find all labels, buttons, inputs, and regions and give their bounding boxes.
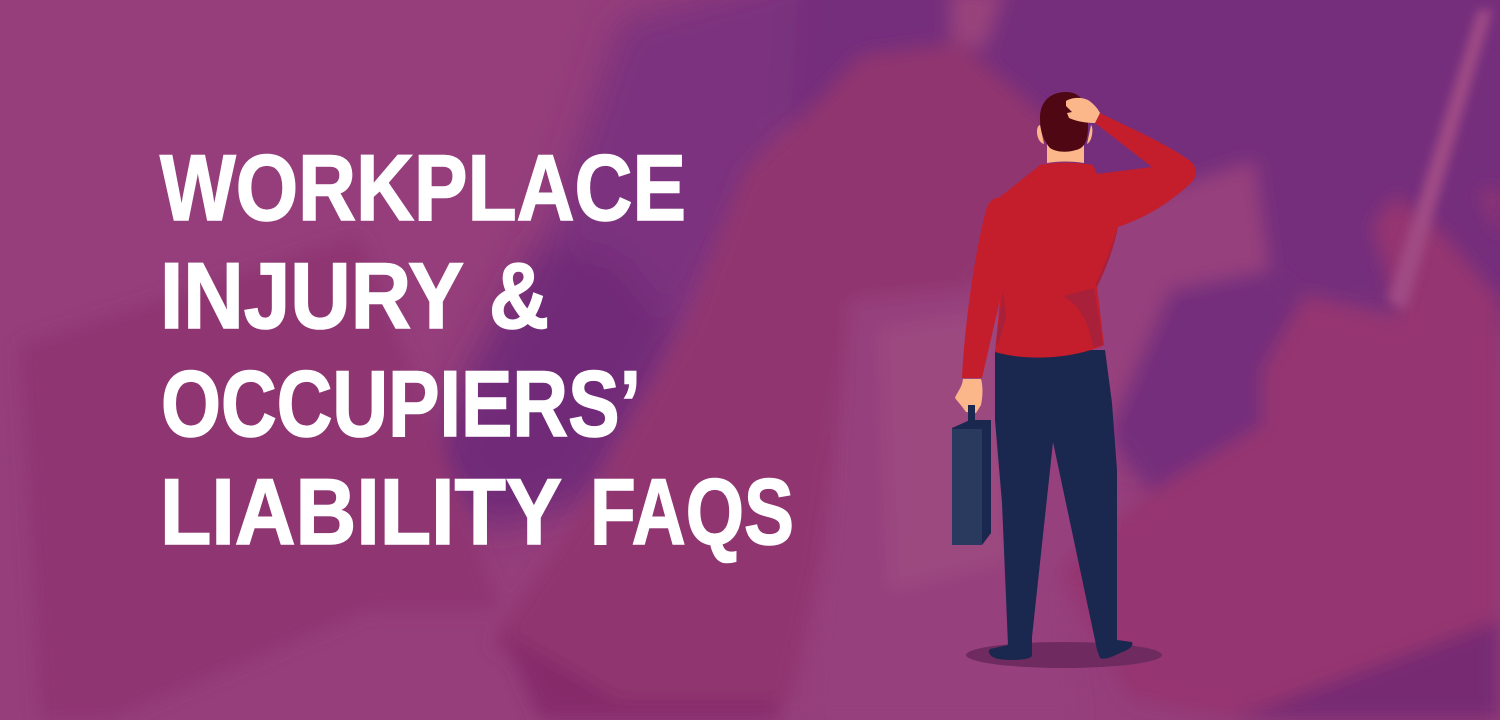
shirt folds [996,227,1118,347]
raised hand [1066,98,1100,123]
hair [1040,92,1088,152]
ground shadow [966,642,1162,668]
icon: confused man with briefcase [952,92,1196,668]
neck and ears [1037,125,1092,163]
title: & [489,243,549,348]
shirt [962,113,1196,378]
title: FAQS [590,459,794,564]
title: WORKPLACE [160,135,686,240]
title: INJURY [160,243,464,348]
title: LIABILITY [160,459,562,564]
trousers [989,350,1132,660]
title: OCCUPIERS’ [161,351,641,456]
title [160,135,794,564]
briefcase [952,405,991,545]
lower hand [955,379,982,413]
pen [1388,10,1492,310]
